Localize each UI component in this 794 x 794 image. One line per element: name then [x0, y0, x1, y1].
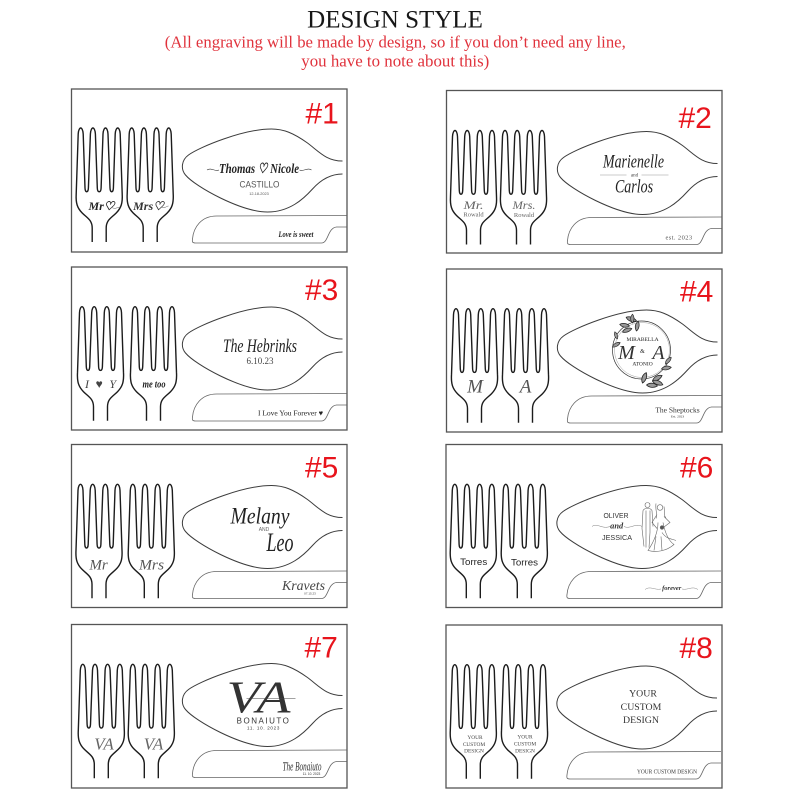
- cake server blade: [182, 664, 342, 746]
- fork engraving: Mr♡: [87, 199, 116, 213]
- fork engraving: [462, 198, 536, 219]
- knife engraving: forever: [662, 585, 682, 592]
- server engraving: [600, 152, 668, 198]
- fork engraving: [87, 199, 168, 213]
- cake server blade: [557, 486, 717, 568]
- panel: design 3: [72, 267, 347, 430]
- fork engraving: [88, 558, 164, 574]
- number badge 8: #8: [680, 632, 713, 665]
- forks 5: [76, 484, 174, 598]
- number badge 7: #7: [304, 631, 338, 664]
- knife engraving: Est. 2023: [671, 415, 684, 419]
- number badge 3: #3: [305, 274, 338, 307]
- server engraving: JESSICA: [602, 535, 632, 542]
- server engraving: [223, 337, 297, 366]
- fork engraving: Rowald: [514, 212, 535, 219]
- number badge 6: #6: [680, 451, 713, 484]
- fork engraving: Torres: [511, 558, 539, 568]
- cake server blade: [557, 666, 717, 749]
- panel: design 2: [446, 90, 722, 253]
- cake knife: [192, 571, 346, 598]
- forks 2: [450, 130, 547, 244]
- knife engraving: est. 2023: [665, 234, 693, 242]
- cake knife: [567, 571, 721, 598]
- fork engraving: CUSTOM: [514, 742, 536, 748]
- forks 3: [77, 307, 177, 421]
- monogram text: A: [650, 342, 665, 364]
- server engraving: and: [610, 522, 624, 530]
- server engraving: DESIGN: [623, 715, 659, 726]
- server engraving: Thomas ♡ Nicole: [219, 162, 299, 177]
- title: DESIGN STYLE: [307, 6, 483, 34]
- fork engraving: [94, 734, 164, 754]
- cake server blade: [182, 307, 342, 390]
- knife engraving: Love is sweet: [278, 230, 314, 239]
- server engraving: OLIVER: [604, 513, 628, 520]
- server engraving: Leo: [266, 528, 294, 557]
- cake knife: [192, 394, 346, 421]
- cake knife: [192, 216, 346, 243]
- server engraving: 6.10.23: [246, 356, 274, 366]
- fork engraving: me too: [142, 380, 166, 391]
- monogram text: MIRABELLA: [626, 337, 659, 343]
- fork engraving: CUSTOM: [463, 742, 485, 748]
- cake knife: [567, 396, 722, 423]
- panel: design 1: [72, 89, 347, 252]
- fork engraving: I ♥ Y: [84, 377, 117, 391]
- cake server blade: [557, 310, 718, 393]
- monogram text: M: [617, 342, 636, 364]
- knife engraving: [645, 585, 698, 592]
- cake knife: [567, 752, 721, 779]
- knife engraving: Kravets: [281, 579, 326, 594]
- server monogram: VA: [226, 672, 292, 722]
- forks 1: [76, 128, 173, 242]
- fork engraving: Torres: [460, 557, 488, 567]
- server engraving: CASTILLO: [240, 180, 280, 191]
- knife engraving: The Sheptocks: [655, 406, 700, 415]
- fork engraving: YOUR: [467, 735, 483, 741]
- server engraving: Melany: [230, 504, 290, 528]
- subtitle note: [165, 32, 626, 71]
- panel: design 4: [446, 269, 722, 432]
- server engraving: and: [631, 174, 639, 178]
- subtitle note: (All engraving will be made by design, so if you don’t need any line,: [165, 32, 626, 52]
- fork engraving: YOUR: [517, 735, 533, 741]
- knife engraving: The Bonaiuto: [282, 758, 322, 774]
- fork engraving: VA: [94, 734, 114, 754]
- number badge 4: #4: [680, 276, 713, 309]
- knife engraving: I Love You Forever ♥: [258, 409, 324, 418]
- fork engraving: [463, 735, 536, 755]
- fork engraving: VA: [144, 734, 164, 754]
- cake server blade: [182, 486, 342, 568]
- server engraving: 12-18-2023: [249, 192, 269, 196]
- server engraving: Carlos: [615, 176, 653, 198]
- fork engraving: Mr.: [462, 198, 484, 212]
- cake server blade: [557, 132, 718, 214]
- fork engraving: [460, 557, 539, 568]
- fork engraving: Rowald: [463, 212, 484, 218]
- fork engraving: M: [466, 377, 484, 398]
- monogram text: &: [640, 349, 645, 355]
- subtitle note: you have to note about this): [301, 52, 489, 71]
- panel: design 6: [446, 444, 722, 608]
- forks 8: [450, 665, 548, 779]
- fork engraving: Mr: [88, 558, 108, 574]
- fork engraving: A: [518, 377, 532, 398]
- server engraving: [592, 513, 642, 542]
- server engraving: AND: [259, 527, 270, 533]
- knife engraving: 11. 10. 2023: [303, 772, 320, 776]
- number badge 1: #1: [306, 98, 339, 130]
- fork engraving: Mrs: [138, 558, 164, 574]
- knife engraving: YOUR CUSTOM DESIGN: [637, 769, 698, 775]
- knife engraving: 07.15.23: [304, 591, 316, 595]
- forks 4: [451, 309, 549, 423]
- fork engraving: Mrs♡: [132, 199, 165, 213]
- number badge 2: #2: [678, 102, 712, 135]
- wreath monogram: [612, 314, 672, 388]
- number badge 5: #5: [305, 451, 338, 484]
- server monogram: [226, 672, 296, 730]
- monogram text: [617, 337, 665, 368]
- server monogram: 11. 10. 2023: [247, 726, 280, 730]
- server engraving: The Hebrinks: [223, 337, 297, 357]
- fork engraving: DESIGN: [515, 748, 535, 754]
- cake knife: [192, 750, 346, 778]
- fork engraving: Mrs.: [511, 198, 536, 212]
- fork engraving: DESIGN: [464, 749, 484, 755]
- knife engraving: [655, 406, 700, 419]
- server engraving: [621, 688, 662, 726]
- cake knife: [567, 217, 722, 244]
- server engraving: CUSTOM: [621, 702, 662, 713]
- forks 7: [78, 664, 174, 778]
- panel: design 5: [72, 444, 347, 608]
- panel: design 7: [72, 624, 347, 788]
- fork engraving: [466, 377, 532, 398]
- panel: design 8: [446, 625, 722, 788]
- forks 6: [450, 484, 547, 598]
- knife engraving: [282, 758, 322, 776]
- server engraving: [207, 162, 312, 196]
- server engraving: [230, 504, 294, 557]
- fork engraving: [84, 377, 166, 391]
- cake server blade: [182, 129, 342, 212]
- server engraving: YOUR: [629, 688, 657, 699]
- server engraving: Marienelle: [602, 152, 664, 172]
- server monogram: BONAIUTO: [237, 716, 290, 726]
- icon: bride and groom line drawing: [642, 502, 676, 551]
- monogram text: ATONIO: [632, 362, 653, 368]
